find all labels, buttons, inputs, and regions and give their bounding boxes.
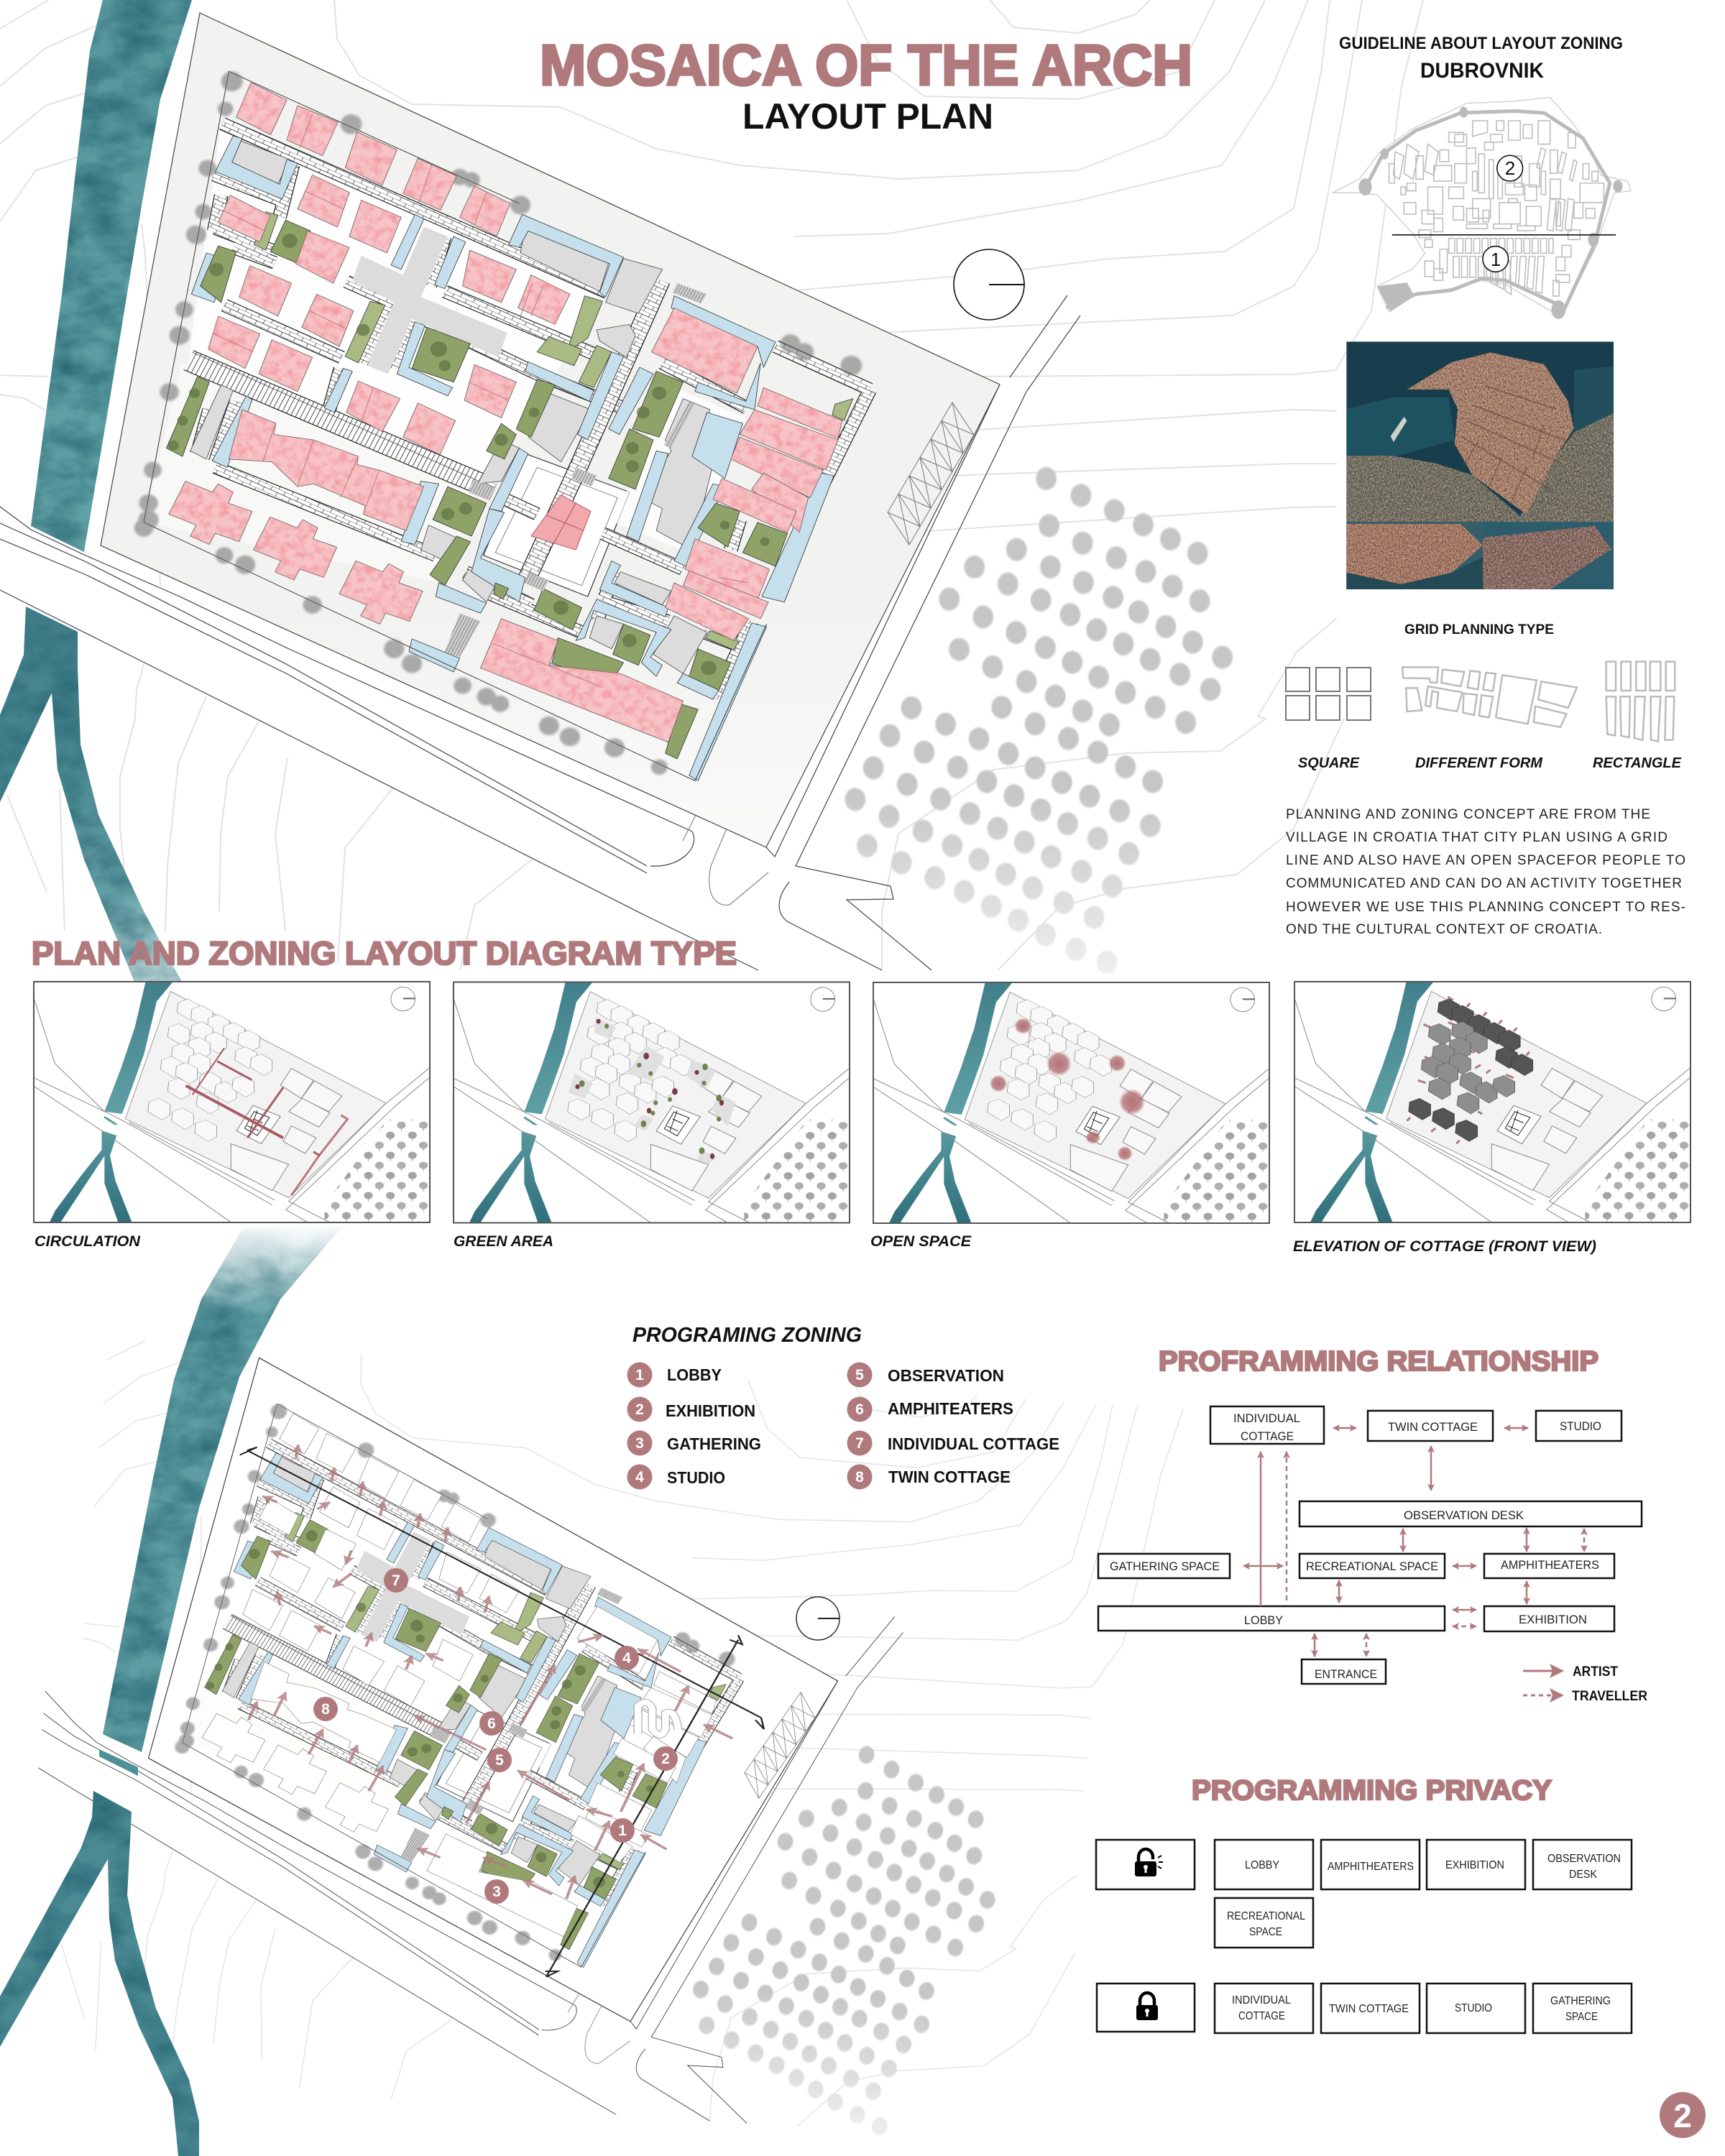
site outline second scene [128, 1353, 862, 2033]
plan number badges: 6 [487, 1715, 496, 1732]
title: MOSAICA OF THE ARCH [540, 33, 1192, 97]
diagram captions: OPEN SPACE [870, 1233, 972, 1250]
artist traveller legend [1523, 1664, 1647, 1704]
relationship diagram boxes [1098, 1406, 1642, 1684]
relationship diagram boxes: ENTRANCE [1315, 1667, 1377, 1681]
privacy open row: LOBBY [1245, 1859, 1279, 1871]
zoning legend: 2 [635, 1401, 644, 1418]
tree field [845, 467, 1233, 974]
concept paragraph: COMMUNICATED AND CAN DO AN ACTIVITY TOGETHER [1286, 876, 1682, 891]
diagram captions: ELEVATION OF COTTAGE (FRONT VIEW) [1293, 1238, 1596, 1255]
zoning legend: 6 [855, 1401, 864, 1418]
bridge lattice [888, 402, 974, 545]
zoning legend: EXHIBITION [666, 1401, 755, 1420]
plan number badges: 4 [622, 1650, 631, 1667]
artist traveller legend: TRAVELLER [1572, 1689, 1647, 1704]
concept paragraph [1286, 807, 1685, 937]
dark cottages [1409, 999, 1533, 1141]
white cottage footprints [187, 1409, 739, 1945]
relationship diagram boxes: COTTAGE [1241, 1429, 1294, 1443]
zoning legend [627, 1363, 1059, 1489]
zoning legend: LOBBY [667, 1365, 722, 1384]
privacy closed row: SPACE [1565, 2011, 1598, 2023]
privacy open row: SPACE [1249, 1926, 1282, 1938]
privacy closed row: INDIVIDUAL [1232, 1994, 1291, 2007]
bridge lattice second scene [742, 1689, 817, 1802]
zoning legend: 7 [855, 1435, 864, 1452]
road network [0, 295, 1080, 970]
concept paragraph: PLANNING AND ZONING CONCEPT ARE FROM THE [1286, 807, 1650, 822]
section lines and movement arrows [240, 1445, 764, 1977]
subtitle: LAYOUT PLAN [742, 96, 993, 137]
zoning legend: 1 [635, 1367, 644, 1383]
plan number badges [313, 1568, 678, 1904]
privacy open row: AMPHITHEATERS [1328, 1861, 1414, 1873]
map markers numbers: 2 [1505, 157, 1515, 179]
bridge strip [99, 1749, 138, 1776]
open space markers [990, 1018, 1145, 1161]
site plot [101, 13, 1000, 847]
grid type labels: SQUARE [1298, 755, 1360, 771]
zoning legend: OBSERVATION [888, 1366, 1004, 1385]
relationship diagram boxes: EXHIBITION [1519, 1613, 1587, 1626]
contour lines top scene [0, 0, 1423, 970]
concept paragraph: LINE AND ALSO HAVE AN OPEN SPACEFOR PEOPLE TO [1286, 853, 1685, 868]
plan number badges: 7 [392, 1572, 400, 1589]
north arrow second scene [796, 1597, 840, 1640]
icon: closed padlock [1136, 1993, 1158, 2020]
zoning legend: GATHERING [667, 1434, 761, 1453]
panel: circulation diagram [34, 982, 430, 1222]
zoning legend: TWIN COTTAGE [888, 1468, 1011, 1486]
aerial photo composite [1346, 341, 1614, 589]
pink cottages and studios [169, 83, 842, 742]
page number badge: 2 [1673, 2097, 1692, 2134]
diagram captions: CIRCULATION [34, 1233, 141, 1250]
plan number badges: 3 [492, 1884, 501, 1900]
map markers numbers: 1 [1491, 249, 1501, 270]
tree field second scene [681, 1736, 1008, 2141]
panel: open space diagram [873, 982, 1269, 1223]
relationship diagram boxes: OBSERVATION DESK [1404, 1508, 1524, 1522]
panel: green area diagram [454, 982, 850, 1223]
privacy closed row: COTTAGE [1238, 2010, 1285, 2022]
plan number badges: 2 [661, 1751, 670, 1767]
road network second scene [12, 1560, 904, 2131]
zoning legend: AMPHITEATERS [888, 1399, 1013, 1418]
diagram captions: GREEN AREA [454, 1233, 553, 1250]
circulation routes [186, 1048, 347, 1195]
relationship diagram boxes: STUDIO [1560, 1419, 1601, 1433]
relationship diagram boxes: INDIVIDUAL [1233, 1411, 1300, 1425]
S-shaped ramp [638, 1703, 678, 1735]
programming zoning heading: PROGRAMING ZONING [632, 1324, 862, 1347]
relationship diagram boxes: LOBBY [1244, 1613, 1283, 1627]
section heading: diagram type: PLAN AND ZONING LAYOUT DIAGRAM TYPE [32, 935, 737, 972]
pink arrows [249, 1445, 732, 1899]
icon: rectangle grid [1606, 662, 1675, 742]
green patches [569, 1017, 736, 1164]
icon: different form grid [1402, 667, 1577, 727]
icon: open padlock [1135, 1849, 1163, 1876]
privacy closed row: GATHERING [1550, 1995, 1611, 2007]
elevation ticks [1407, 997, 1530, 1143]
guideline heading: GUIDELINE ABOUT LAYOUT ZONING [1339, 34, 1623, 53]
north arrow [954, 249, 1025, 320]
icon: square grid [1286, 668, 1371, 720]
river lower branches second scene [0, 1791, 199, 2156]
concept paragraph: HOWEVER WE USE THIS PLANNING CONCEPT TO RES- [1286, 900, 1685, 915]
relationship diagram boxes: AMPHITHEATERS [1501, 1558, 1599, 1572]
grid type labels: DIFFERENT FORM [1415, 755, 1543, 771]
plan number badges: 8 [321, 1701, 330, 1718]
relationship diagram boxes: TWIN COTTAGE [1388, 1420, 1478, 1434]
relationship diagram boxes: RECREATIONAL SPACE [1306, 1560, 1438, 1573]
small trees [575, 1019, 724, 1159]
relationship diagram boxes: GATHERING SPACE [1110, 1560, 1220, 1573]
privacy open row: RECREATIONAL [1227, 1910, 1305, 1922]
river second scene [103, 1222, 359, 1752]
roof ridge lines [212, 114, 749, 687]
guideline heading: DUBROVNIK [1420, 59, 1544, 83]
zoning legend: 5 [855, 1367, 864, 1383]
heading: programming privacy: PROGRAMMING PRIVACY [1192, 1775, 1552, 1806]
grid type labels [1298, 755, 1682, 771]
contour lines lower scene [44, 1338, 1183, 2148]
concept paragraph: VILLAGE IN CROATIA THAT CITY PLAN USING A GRID [1286, 830, 1668, 845]
zoning legend: STUDIO [667, 1468, 725, 1487]
privacy open row [1096, 1840, 1632, 1948]
grid planning heading: GRID PLANNING TYPE [1404, 622, 1554, 637]
zoning legend: 3 [635, 1435, 644, 1452]
layout plan drawing [134, 71, 870, 780]
river lower branches [0, 607, 182, 982]
grid type labels: RECTANGLE [1593, 755, 1682, 771]
page number badge [1660, 2092, 1706, 2138]
guideline heading [1339, 34, 1623, 83]
zoning legend: INDIVIDUAL COTTAGE [888, 1434, 1059, 1453]
artist traveller legend: ARTIST [1573, 1664, 1618, 1680]
concept paragraph: OND THE CULTURAL CONTEXT OF CROATIA. [1286, 922, 1602, 937]
panel: elevation of cottage diagram [1294, 982, 1690, 1222]
section cut lines [240, 1447, 764, 1977]
plan number badges: 5 [495, 1752, 504, 1769]
privacy closed row [1097, 1984, 1632, 2033]
plan number badges: 1 [618, 1823, 627, 1839]
diagram captions [34, 1233, 1596, 1255]
zoning legend: 4 [635, 1469, 644, 1485]
heading: programming relationship: PROFRAMMING RELATIONSHIP [1159, 1346, 1598, 1377]
programming zoning plan [119, 1353, 1039, 2141]
privacy closed row: TWIN COTTAGE [1329, 2003, 1409, 2015]
river top [31, 0, 192, 552]
zoning legend: 8 [855, 1469, 864, 1485]
relationship arrows [1243, 1428, 1584, 1657]
privacy open row: DESK [1569, 1869, 1597, 1881]
privacy open row: OBSERVATION [1547, 1853, 1621, 1865]
privacy open row: EXHIBITION [1445, 1859, 1504, 1871]
map markers numbers [1491, 157, 1515, 270]
central pavilion [531, 495, 591, 550]
Dubrovnik city map [1333, 98, 1631, 319]
privacy closed row: STUDIO [1455, 2002, 1492, 2014]
mid grey cottages [1421, 1022, 1514, 1114]
